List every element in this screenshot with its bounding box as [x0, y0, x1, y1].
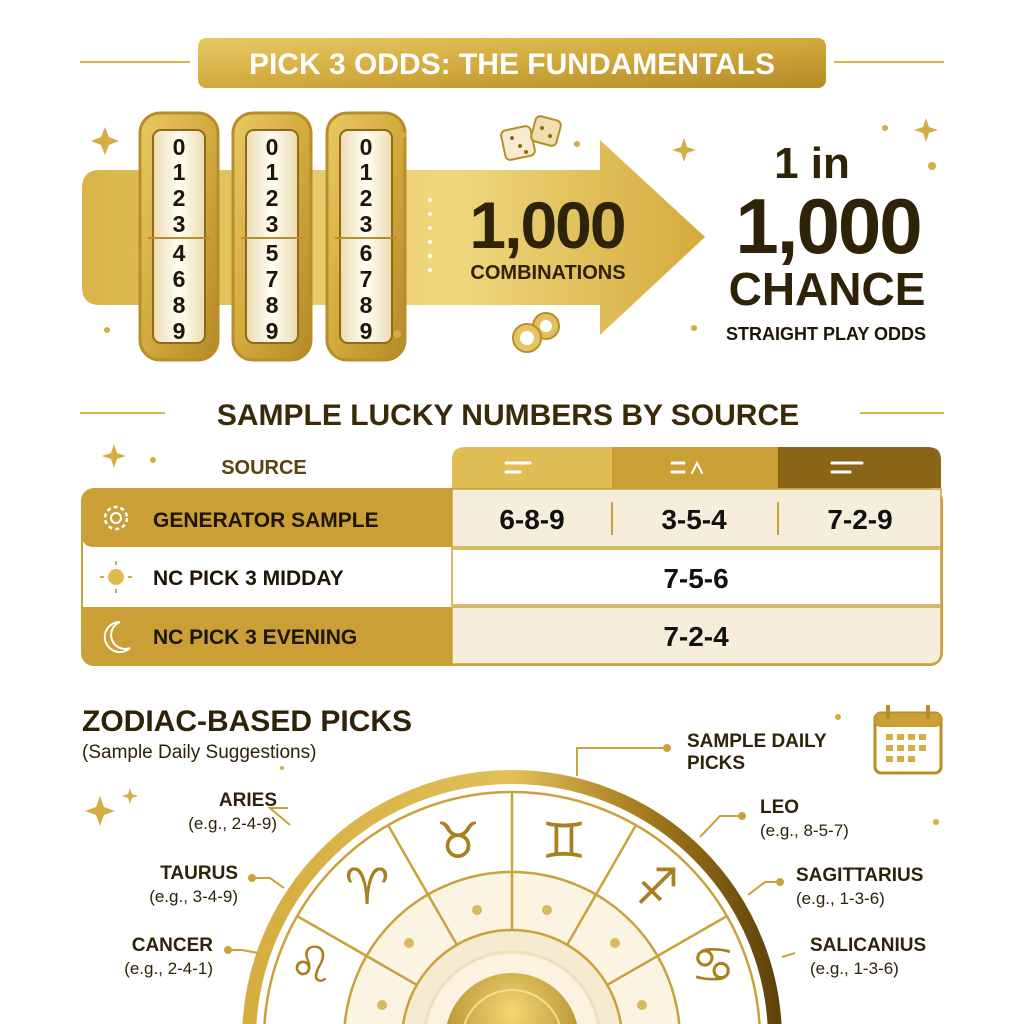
odds callout: 1 in 1,000 chance	[726, 139, 926, 344]
row: generator sample: 6-8-9	[499, 504, 565, 535]
heading: sample lucky numbers: SAMPLE LUCKY NUMBERS BY SOURCE	[217, 399, 799, 432]
label: taurus	[149, 863, 284, 906]
sparkles top	[91, 118, 938, 338]
zodiac wheel: ♌	[289, 937, 333, 993]
sparkles bottom	[85, 714, 939, 826]
reels: 8	[360, 292, 373, 318]
row: evening: NC PICK 3 EVENING	[153, 626, 357, 649]
label: cancer: CANCER	[132, 935, 213, 956]
reels: 6	[360, 240, 372, 266]
icon: calendar	[875, 705, 941, 773]
callout: sample daily picks: SAMPLE DAILY	[687, 731, 827, 752]
odds callout: 1 in 1,000 chance: 1,000	[735, 182, 921, 270]
callout: sample daily picks	[577, 731, 827, 776]
table: lucky numbers: SOURCE	[221, 457, 307, 479]
label: taurus: (e.g., 3-4-9)	[149, 887, 238, 906]
label: aries	[188, 790, 290, 833]
zodiac wheel: ♊	[542, 813, 586, 869]
reels: 0	[173, 134, 185, 160]
arrow: combinations: COMBINATIONS	[470, 262, 626, 284]
label: sagittarius	[748, 865, 923, 908]
label: taurus: TAURUS	[160, 863, 238, 884]
zodiac wheel: ♐	[635, 859, 679, 915]
reels: 7	[266, 266, 278, 292]
row: midday	[100, 549, 941, 605]
reels	[140, 113, 405, 360]
sparkle left	[102, 444, 156, 468]
heading: zodiac: ZODIAC-BASED PICKS	[82, 705, 412, 738]
reels: 2	[266, 185, 278, 211]
odds callout: 1 in 1,000 chance: STRAIGHT PLAY ODDS	[726, 324, 926, 344]
label: salicanius: SALICANIUS	[810, 935, 926, 956]
label: leo: (e.g., 8-5-7)	[760, 821, 849, 840]
reels: 2	[173, 185, 185, 211]
reels: 3	[173, 211, 185, 237]
icon: lottery balls	[513, 313, 559, 352]
reels: 0	[360, 134, 372, 160]
row: generator sample: 7-2-9	[827, 504, 893, 535]
heading: zodiac	[82, 705, 412, 763]
reels: 9	[173, 318, 185, 344]
reels: 6	[173, 266, 185, 292]
callout: sample daily picks: PICKS	[687, 753, 745, 774]
label: sagittarius: SAGITTARIUS	[796, 865, 923, 886]
arrow: combinations	[82, 140, 705, 335]
row: generator sample: 3-5-4	[661, 504, 727, 535]
reels: 4	[173, 240, 186, 266]
label: salicanius	[782, 935, 926, 978]
zodiac wheel	[242, 770, 782, 1024]
reels: 3	[266, 211, 278, 237]
row: generator sample	[82, 489, 941, 547]
reels: 1	[173, 159, 186, 185]
zodiac wheel: ♉	[436, 813, 480, 869]
table: lucky numbers	[82, 447, 942, 665]
zodiac wheel: ♈	[345, 859, 389, 915]
label: aries: (e.g., 2-4-9)	[188, 814, 277, 833]
zodiac wheel: ♋	[691, 937, 735, 993]
label: cancer	[124, 935, 258, 978]
reels: 7	[360, 266, 372, 292]
reels: 3	[360, 211, 372, 237]
label: aries: ARIES	[219, 790, 277, 811]
title banner: PICK 3 ODDS: THE FUNDAMENTALS	[249, 48, 775, 81]
label: salicanius: (e.g., 1-3-6)	[810, 959, 899, 978]
label: leo	[700, 797, 849, 840]
row: midday: NC PICK 3 MIDDAY	[153, 567, 344, 590]
reels: 9	[266, 318, 278, 344]
reels: 9	[360, 318, 372, 344]
table header	[452, 447, 941, 488]
reels: 8	[173, 292, 186, 318]
reels: 1	[266, 159, 279, 185]
heading: zodiac: (Sample Daily Suggestions)	[82, 742, 316, 763]
row: evening	[82, 607, 941, 664]
label: sagittarius: (e.g., 1-3-6)	[796, 889, 885, 908]
reels: 1	[360, 159, 373, 185]
arrow: combinations: 1,000	[469, 188, 625, 262]
label: leo: LEO	[760, 797, 799, 818]
icon: dice	[500, 115, 562, 161]
row: midday: 7-5-6	[663, 563, 729, 594]
title banner	[80, 38, 944, 88]
reels: 5	[266, 240, 279, 266]
label: cancer: (e.g., 2-4-1)	[124, 959, 213, 978]
odds callout: 1 in 1,000 chance: CHANCE	[729, 263, 925, 315]
row: evening: 7-2-4	[663, 621, 729, 652]
reels: 0	[266, 134, 278, 160]
reels: 8	[266, 292, 279, 318]
row: generator sample: GENERATOR SAMPLE	[153, 509, 379, 532]
odds callout: 1 in 1,000 chance: 1 in	[774, 139, 850, 188]
reels: 2	[360, 185, 372, 211]
